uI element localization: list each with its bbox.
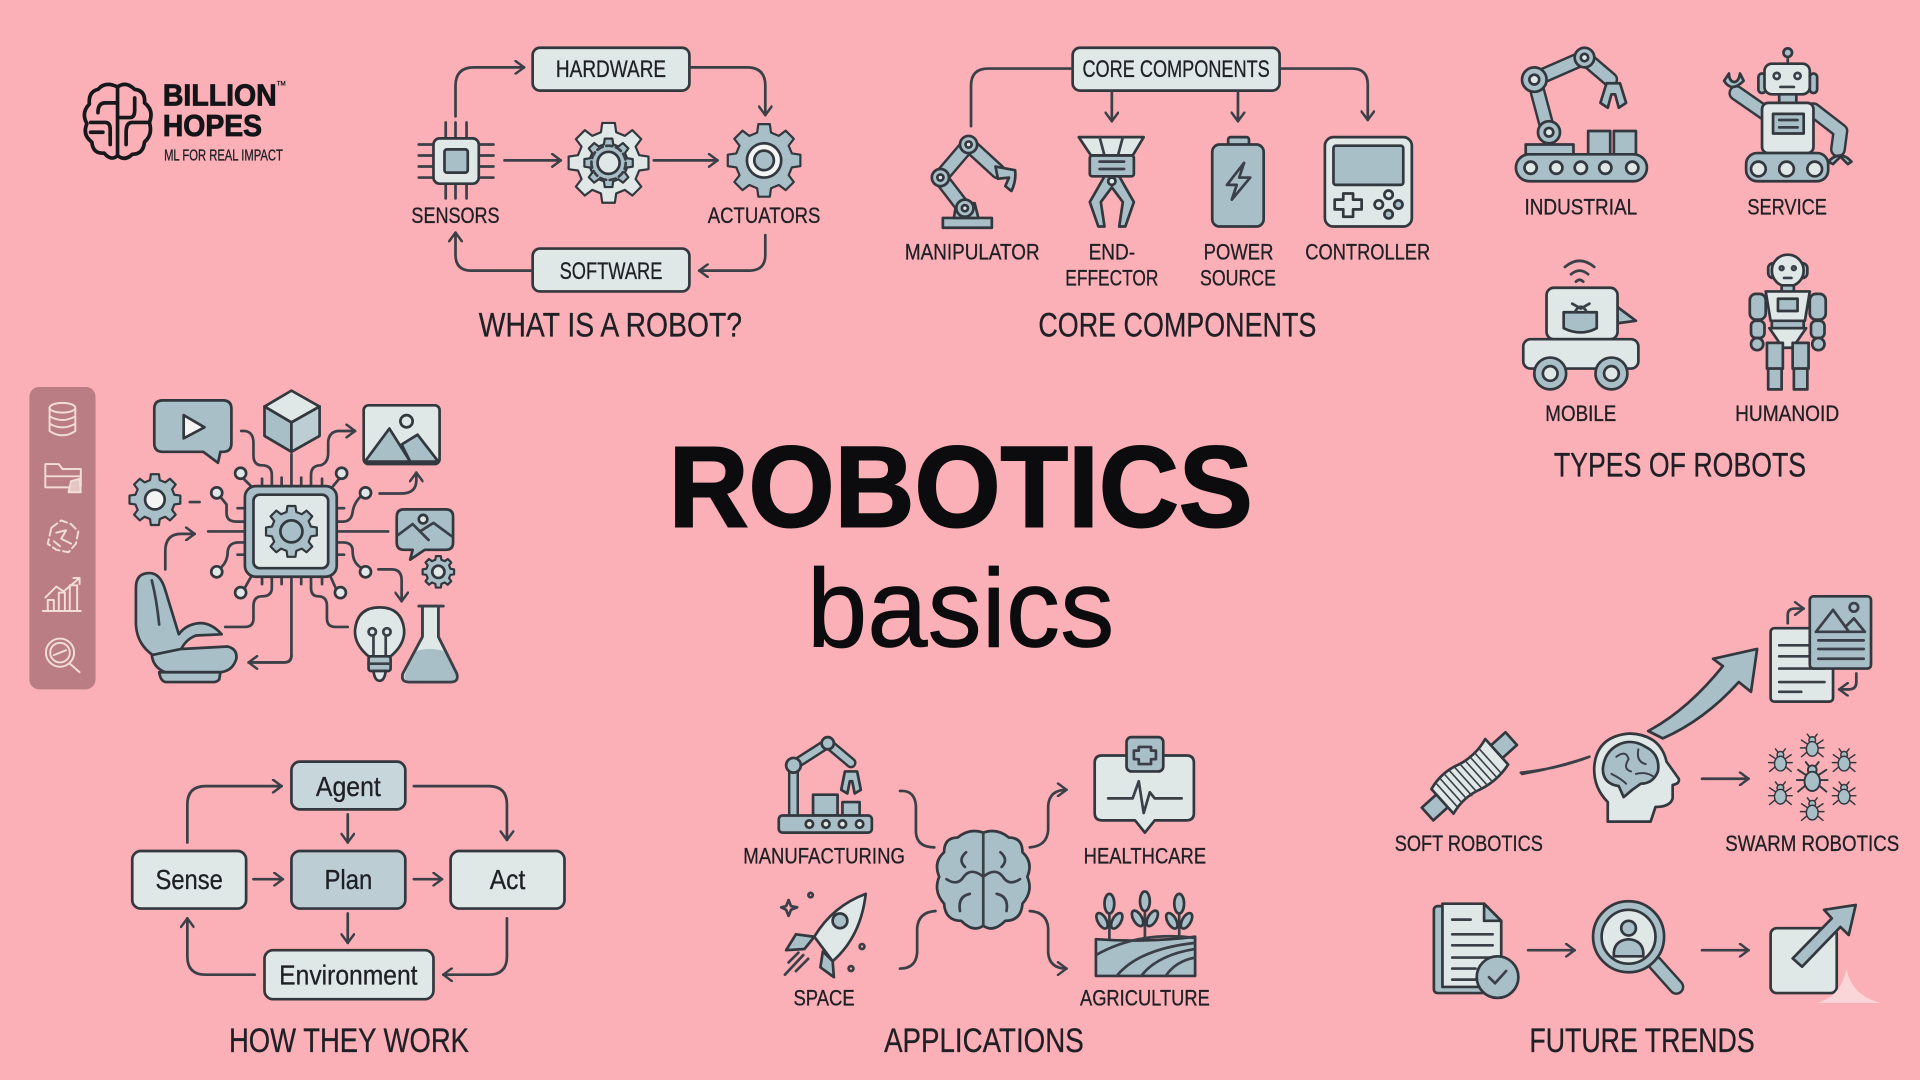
label: healthcare: HEALTHCARE <box>1084 843 1206 868</box>
icon: humanoid robot <box>1750 255 1826 389</box>
logo wordmark: BILLION <box>163 78 277 112</box>
labels: component names: END- <box>1089 240 1135 265</box>
icon: flask <box>402 606 457 682</box>
arrows: robot loop <box>456 67 765 271</box>
logo: Billion Hopes: HOPES <box>163 109 262 143</box>
icon: service robot <box>1724 48 1851 181</box>
icon: light bulb <box>355 607 404 681</box>
icon: growth chart <box>43 578 81 611</box>
box: environment <box>264 950 433 999</box>
icon: soft robot gripper <box>1415 725 1524 829</box>
icon: battery <box>1212 137 1264 227</box>
label: soft robotics: SOFT ROBOTICS <box>1395 831 1543 856</box>
icon: checked document <box>1434 904 1518 998</box>
title: robotics basics <box>669 424 1253 671</box>
box: sense <box>132 851 246 909</box>
arrows: sense-plan-act loop <box>187 786 507 975</box>
box: core components: CORE COMPONENTS <box>1082 56 1270 83</box>
icon: mobile robot <box>1523 261 1638 389</box>
box: environment: Environment <box>279 959 418 990</box>
icon: industrial robot <box>1516 48 1647 181</box>
icon: documents <box>1771 596 1871 702</box>
box: core components <box>1073 48 1280 91</box>
icon: small gear <box>423 556 454 588</box>
box: software: SOFTWARE <box>560 258 662 285</box>
sidebar: toolbar with icons <box>29 387 96 689</box>
icon: magnifier <box>46 639 80 672</box>
heading: core components: CORE COMPONENTS <box>1038 307 1316 345</box>
icon: central brain <box>937 831 1030 928</box>
icon: database <box>50 403 75 435</box>
logo: Billion Hopes: TM <box>277 81 286 88</box>
icon: head with brain <box>1594 733 1679 822</box>
icon: magnifier with person <box>1593 901 1676 987</box>
arrow: search to growth <box>1702 949 1749 951</box>
label: agriculture: AGRICULTURE <box>1080 985 1210 1010</box>
box: sense: Sense <box>156 864 223 895</box>
labels: component names: CONTROLLER <box>1305 240 1430 265</box>
icon: picture frame <box>364 405 440 464</box>
icon: sensor chip <box>419 122 493 198</box>
connectors: brain links <box>900 790 1067 969</box>
logo: Billion Hopes <box>84 78 286 164</box>
labels: mobile and humanoid: HUMANOID <box>1735 401 1839 426</box>
icon: folder <box>45 464 81 492</box>
title: robotics basics: ROBOTICS <box>669 424 1253 552</box>
icon: circuit brain logo <box>84 84 151 158</box>
icon: manufacturing robot <box>779 737 872 833</box>
labels: mobile and humanoid <box>1545 401 1839 426</box>
labels: industrial and service <box>1524 194 1827 219</box>
labels: industrial and service: INDUSTRIAL <box>1524 194 1637 219</box>
logo: Billion Hopes: ML FOR REAL IMPACT <box>164 147 283 164</box>
box: plan: Plan <box>324 864 372 895</box>
labels: component names: POWER <box>1204 240 1273 265</box>
icon: robot swarm <box>1769 734 1856 820</box>
icon: manipulator arm <box>932 136 1015 228</box>
labels: component names: SOURCE <box>1200 265 1276 290</box>
box: act: Act <box>490 864 525 895</box>
heading: applications: APPLICATIONS <box>884 1022 1084 1060</box>
title: robotics basics: basics <box>807 546 1114 671</box>
icon: agriculture field <box>1094 891 1195 976</box>
panel: central processor diagram <box>129 391 457 682</box>
connectors: circuit traces <box>165 431 416 662</box>
box: hardware <box>533 48 689 91</box>
labels: mobile and humanoid: MOBILE <box>1545 401 1616 426</box>
icon: network cloud <box>48 520 78 552</box>
icon: processing gear <box>569 123 648 203</box>
box: hardware: HARDWARE <box>556 56 666 83</box>
icon: central chip with gear <box>245 486 337 577</box>
decoration: pale spot <box>1816 969 1881 1003</box>
labels: component names: EFFECTOR <box>1065 265 1158 290</box>
nodes: circuit terminals <box>211 468 371 598</box>
panel: what is a robot <box>411 48 820 345</box>
box: agent: Agent <box>316 771 381 802</box>
icon: picture speech bubble <box>397 509 453 560</box>
box: software <box>533 249 689 291</box>
icon: game controller <box>1325 137 1412 227</box>
heading: future trends: FUTURE TRENDS <box>1529 1022 1755 1060</box>
panel: types of robots <box>1516 48 1851 484</box>
icon: robot seat <box>136 573 236 682</box>
box: act <box>451 851 564 909</box>
icon: box with rising arrow <box>1771 905 1856 993</box>
arrow: big growth arrow <box>1648 649 1757 738</box>
labels: component names: MANIPULATOR <box>905 240 1040 265</box>
icon: video speech bubble <box>154 400 231 463</box>
icon: space rocket <box>781 893 866 977</box>
heading: how they work: HOW THEY WORK <box>229 1022 469 1060</box>
icon: healthcare monitor <box>1095 737 1194 833</box>
label: sensors: SENSORS <box>411 203 500 228</box>
icon: actuator gear <box>728 124 800 197</box>
box: agent <box>291 762 405 809</box>
label: actuators: ACTUATORS <box>708 203 820 228</box>
heading: types of robots: TYPES OF ROBOTS <box>1554 446 1806 484</box>
icon: cube <box>264 391 320 452</box>
arrow: to swarm <box>1702 778 1749 780</box>
box: plan <box>291 851 405 909</box>
panel: future trends <box>1395 596 1899 1060</box>
arrow: thin curve into head <box>1521 757 1589 774</box>
icon: end-effector <box>1079 137 1144 227</box>
panel: core components <box>905 48 1430 345</box>
panel: applications <box>743 737 1210 1060</box>
labels: industrial and service: SERVICE <box>1747 194 1827 219</box>
label: manufacturing: MANUFACTURING <box>743 843 905 868</box>
label: space: SPACE <box>793 985 855 1010</box>
arrow: document to search <box>1528 949 1575 951</box>
icon: settings gear <box>129 474 180 525</box>
arrows: component tree <box>971 69 1368 126</box>
labels: component names <box>905 240 1430 290</box>
panel: how they work <box>132 762 564 1060</box>
heading: what is a robot: WHAT IS A ROBOT? <box>479 307 742 345</box>
